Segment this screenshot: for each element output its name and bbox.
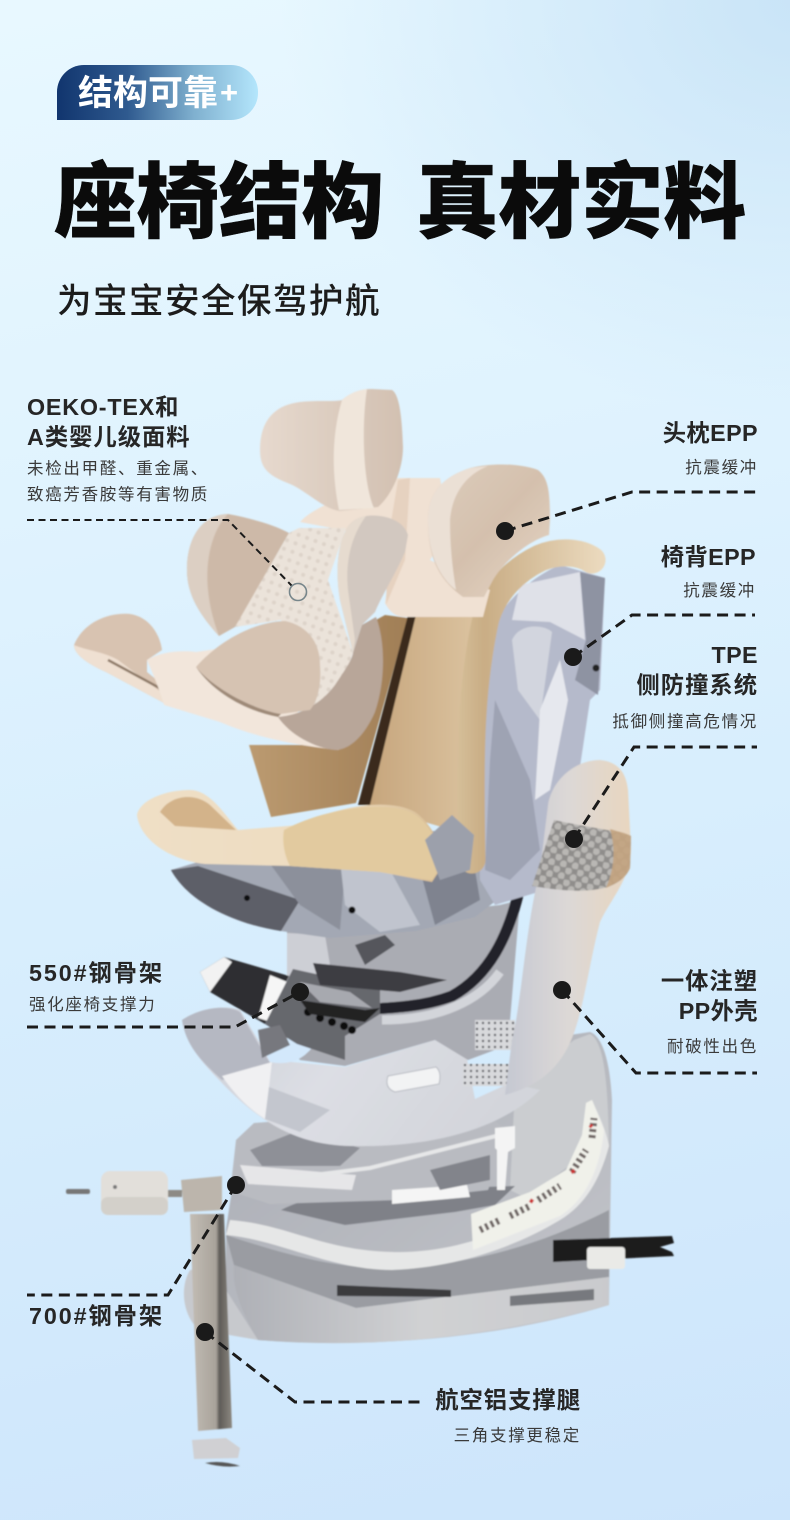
callout: TPE side impact: 侧防撞系统	[637, 672, 758, 698]
seat base	[184, 1032, 612, 1343]
bowl of the PP shell	[182, 1007, 540, 1146]
leader: back EPP	[564, 615, 755, 666]
callout: PP shell: 一体注塑	[661, 968, 758, 994]
leader: aluminium leg	[196, 1323, 420, 1402]
leader: TPE	[565, 747, 757, 848]
leader: headrest EPP	[496, 492, 757, 540]
instruction stickers	[471, 1100, 604, 1250]
badge: 结构可靠+	[57, 65, 258, 120]
callout: 550 steel frame	[29, 960, 164, 1014]
aluminium support leg	[181, 1176, 240, 1467]
side impact button and pin	[66, 1171, 182, 1215]
callout: 700 steel frame: 700#钢骨架	[29, 1303, 164, 1329]
callout: back EPP	[661, 544, 756, 600]
callout: headrest EPP: 头枕EPP	[663, 420, 758, 446]
callout: OEKO-TEX fabric: 致癌芳香胺等有害物质	[27, 486, 209, 504]
inner pad left wing	[187, 514, 289, 636]
footrest wing	[74, 614, 181, 703]
PP outer shell	[505, 760, 631, 1095]
leader: fabric	[27, 520, 306, 600]
isofix strap	[553, 1236, 674, 1269]
callout: aluminium support leg: 航空铝支撑腿	[435, 1387, 581, 1413]
callout: OEKO-TEX fabric	[27, 394, 209, 504]
callout: aluminium support leg	[435, 1387, 581, 1445]
cream seat tray	[147, 640, 339, 750]
leader: 700 steel	[27, 1176, 245, 1295]
upper armrest band	[471, 553, 592, 860]
taupe seat cushion	[196, 621, 320, 717]
mesh fabric centre	[235, 528, 353, 720]
callout: aluminium support leg: 三角支撑更稳定	[454, 1427, 581, 1445]
callout: 550 steel frame: 强化座椅支撑力	[29, 996, 156, 1014]
cream back panel	[300, 478, 490, 617]
leader: PP shell	[553, 981, 757, 1073]
callout: headrest EPP: 抗震缓冲	[685, 459, 758, 477]
TPE side impact honeycomb pad	[532, 820, 631, 891]
callout lines and markers	[27, 492, 757, 1402]
black curved frame rail	[320, 895, 518, 1020]
callout: OEKO-TEX fabric: 未检出甲醛、重金属、	[27, 460, 209, 478]
callout: TPE side impact: TPE	[711, 642, 758, 668]
seat underside shell	[171, 830, 515, 938]
callout: PP shell: 耐破性出色	[667, 1038, 758, 1056]
callout: back EPP: 椅背EPP	[661, 544, 756, 570]
callout: OEKO-TEX fabric: OEKO-TEX和	[27, 394, 179, 420]
callout: headrest EPP	[663, 420, 758, 477]
inner frame behind steel	[260, 900, 520, 1086]
subtitle: 为宝宝安全保驾护航	[57, 283, 381, 321]
callout: PP shell	[661, 968, 758, 1056]
callout: OEKO-TEX fabric: A类婴儿级面料	[27, 424, 191, 450]
leader: 550 steel	[27, 983, 309, 1027]
grey back shell	[478, 565, 605, 905]
callout: PP shell: PP外壳	[679, 998, 758, 1024]
callout: 550 steel frame: 550#钢骨架	[29, 960, 164, 986]
inner pad right wing	[338, 516, 408, 653]
upper headrest	[260, 389, 403, 511]
taupe lower side cushion	[278, 617, 383, 750]
callout: TPE side impact: 抵御侧撞高危情况	[612, 713, 758, 731]
title: 座椅结构 真材实料	[54, 157, 746, 249]
550 steel frame parts	[200, 935, 447, 1060]
lower armrest	[137, 790, 474, 882]
bronze energy absorbing layer	[249, 615, 482, 833]
callout: TPE side impact	[612, 642, 758, 731]
badge: 结构可靠+: 结构可靠+	[78, 74, 238, 113]
swivel mechanism platform	[232, 1118, 515, 1204]
callout: back EPP: 抗震缓冲	[683, 582, 756, 600]
headrest side wing EPP	[428, 464, 550, 597]
